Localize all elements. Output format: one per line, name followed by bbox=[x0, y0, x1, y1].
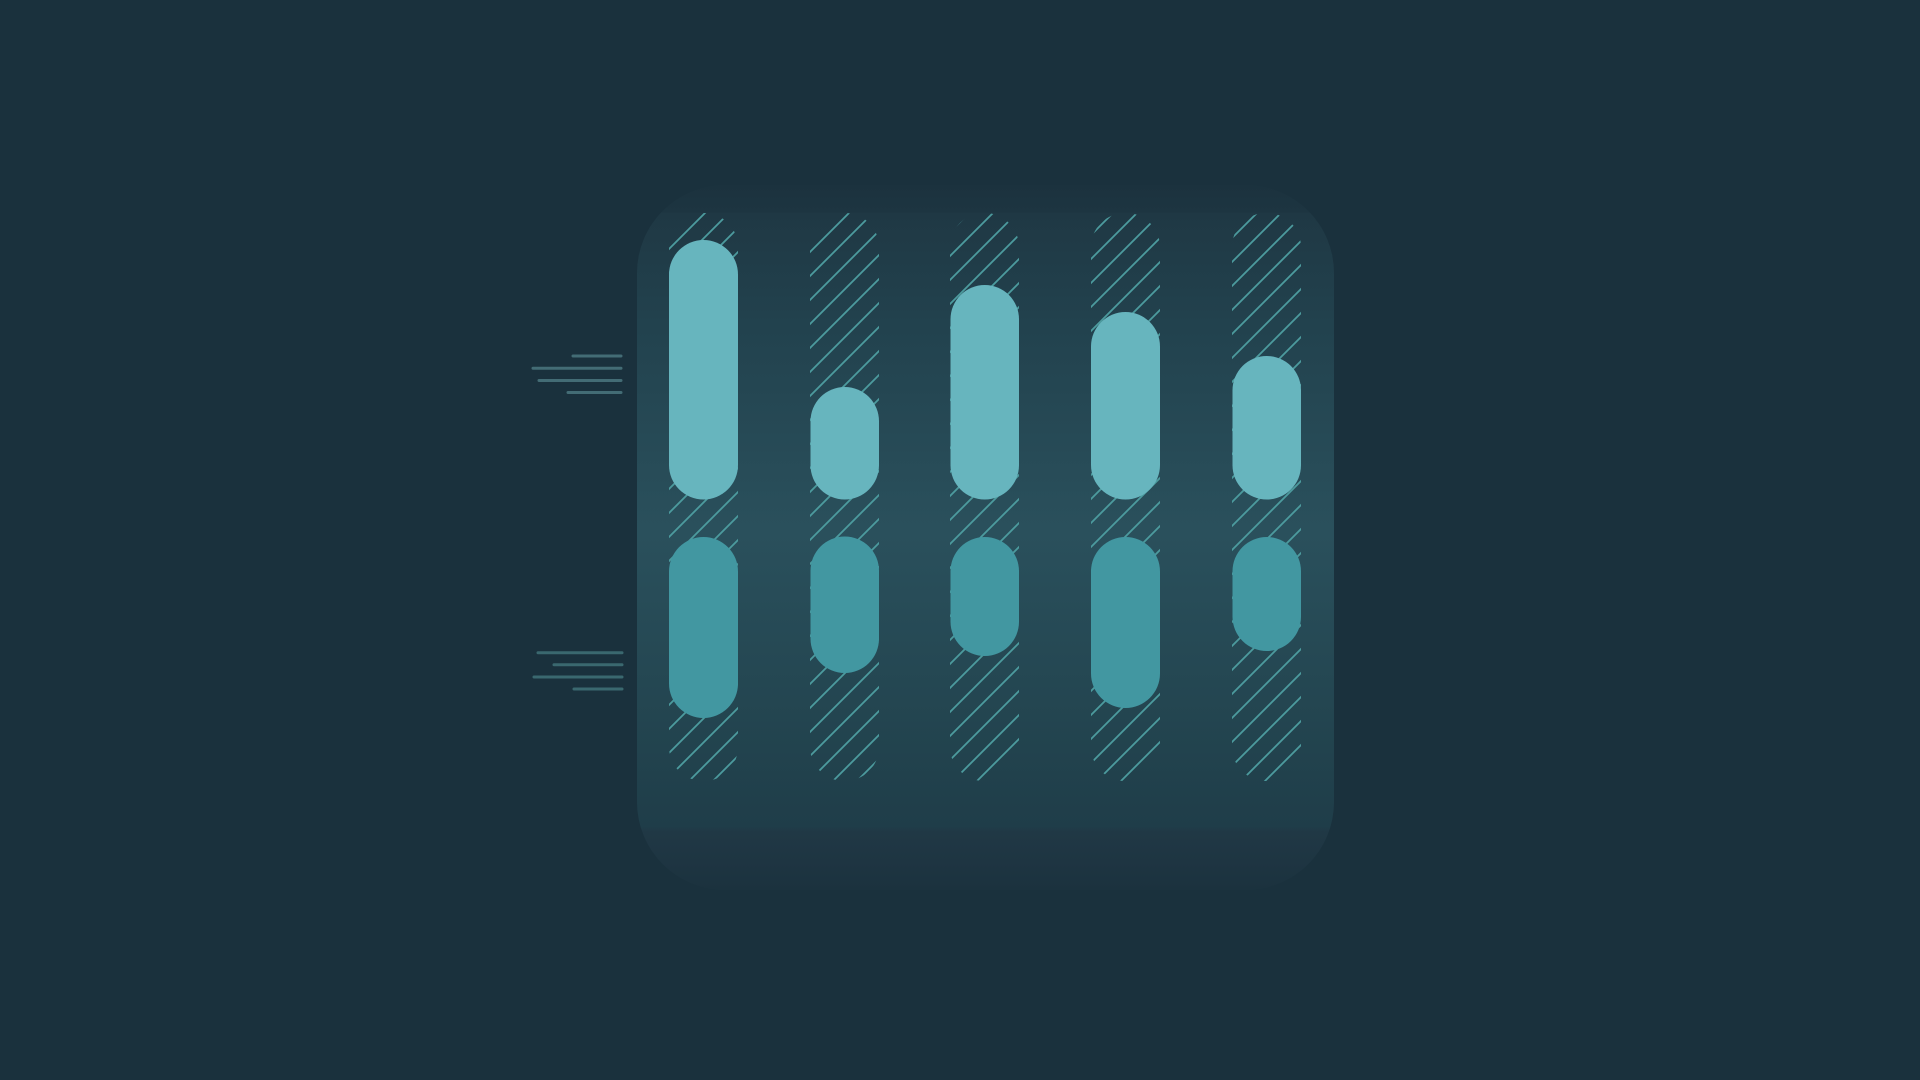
legend lines: upper series bbox=[533, 356, 621, 392]
hatched column tracks bbox=[669, 213, 1301, 781]
legend lines: lower series bbox=[534, 653, 622, 689]
panel: chart backdrop bbox=[637, 185, 1334, 890]
upper bars bbox=[669, 240, 1301, 500]
lower bars bbox=[669, 536, 1301, 718]
